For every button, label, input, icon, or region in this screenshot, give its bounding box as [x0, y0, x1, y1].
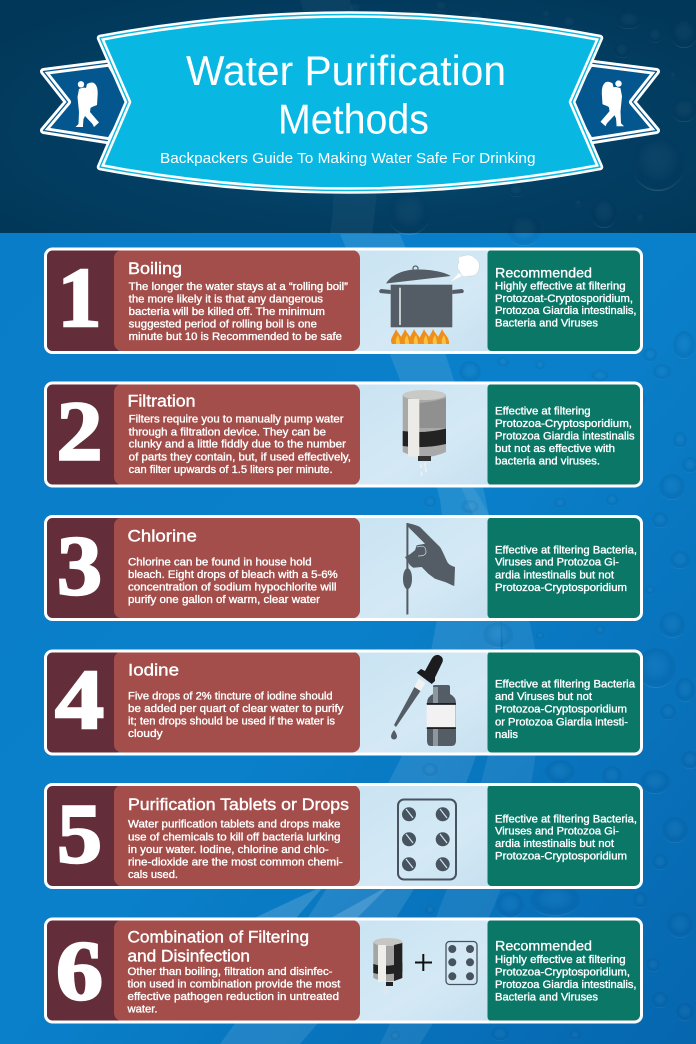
effectiveness text: Effective at filtering	[495, 405, 591, 417]
effectiveness text: ardia intestinalis but not	[495, 838, 614, 850]
icon: small tablets	[446, 942, 477, 984]
text block: purify one gallon of warm, clear water	[128, 594, 320, 606]
number: 5	[57, 787, 102, 881]
number: 6	[56, 924, 103, 1018]
effectiveness text: Protozoa-Cryptosporidium	[495, 851, 627, 863]
text block: can filter upwards of 1.5 liters per minute.	[129, 464, 333, 476]
effectiveness text: Bacteria and Viruses	[495, 318, 599, 330]
text block	[128, 690, 344, 740]
text block: cals used.	[128, 869, 178, 881]
image panel	[340, 518, 500, 618]
title: Methods	[278, 96, 429, 142]
title	[186, 47, 506, 142]
heading: Iodine	[128, 662, 179, 680]
panel: 4 iodine	[46, 651, 642, 754]
icon: hand with pipette	[403, 523, 455, 614]
text block: bacteria will be killed off. The minimum	[129, 306, 325, 318]
teal panel	[488, 518, 641, 618]
image panel	[340, 785, 500, 886]
text block: through a filtration device. They can be	[129, 426, 326, 438]
effectiveness text: Viruses and Protozoa Gi-	[495, 557, 619, 569]
effectiveness text	[495, 954, 636, 1004]
effectiveness text: Viruses and Protozoa Gi-	[495, 826, 619, 838]
text block: bleach. Eight drops of bleach with a 5-6%	[128, 569, 338, 581]
description panel	[114, 920, 360, 1021]
text block	[129, 414, 351, 476]
teal panel	[488, 384, 641, 485]
description panel	[114, 384, 360, 485]
number panel	[46, 652, 122, 752]
teal panel	[488, 920, 641, 1021]
frame	[46, 651, 642, 754]
number panel	[46, 518, 122, 618]
teal panel	[488, 652, 641, 752]
frame	[46, 383, 642, 486]
icon: hiker left	[76, 81, 99, 127]
image panel	[340, 652, 500, 752]
heading	[128, 929, 309, 966]
text block	[129, 281, 348, 343]
effectiveness text: or Protozoa Giardia intesti-	[495, 716, 628, 728]
icon: filter plus tablets	[373, 938, 477, 994]
image panel	[340, 384, 500, 485]
effectiveness text: Protozoa Giardia intestinalis,	[495, 305, 636, 317]
text block: effective pathogen reduction in untreated	[128, 991, 339, 1003]
ribbon: right with hiker	[568, 63, 656, 141]
icon: small filter	[373, 938, 402, 994]
teal panel	[488, 250, 641, 351]
number panel	[46, 384, 122, 485]
text block: Water purification tablets and drops make	[128, 819, 340, 831]
text block: Filters require you to manually pump water	[129, 414, 344, 426]
image panel	[340, 250, 500, 351]
heading: Purification Tablets or Drops	[128, 796, 349, 814]
effectiveness text	[495, 813, 637, 863]
subtitle: Backpackers Guide To Making Water Safe For Drinking	[160, 150, 536, 167]
description panel	[114, 652, 360, 752]
panel: 1 boiling	[46, 249, 642, 352]
effectiveness text	[495, 679, 635, 741]
text block: the more likely it is that any dangerous	[129, 294, 324, 306]
effectiveness text: Effective at filtering Bacteria,	[495, 544, 637, 556]
effectiveness text: Protozoa-Cryptosporidium	[495, 582, 627, 594]
text block: Other than boiling, filtration and disinfec-	[128, 966, 333, 978]
number: 3	[57, 519, 102, 613]
effectiveness text: Highly effective at filtering	[495, 954, 626, 966]
effectiveness text: ardia intestinalis but not	[495, 569, 614, 581]
text block: minute but 10 is Recommended to be safe	[129, 331, 342, 343]
frame	[46, 919, 642, 1022]
panel: 5 tablets	[46, 784, 642, 888]
effectiveness text	[495, 405, 635, 467]
heading: Chlorine	[128, 528, 197, 546]
text block: rine-dioxide are the most common chemi-	[128, 857, 343, 869]
effectiveness text: Highly effective at filtering	[495, 280, 626, 292]
ribbon: left with hiker	[44, 63, 132, 141]
effectiveness text: Protozoa-Cryptosporidium,	[495, 967, 630, 979]
text block	[128, 556, 338, 606]
text block: it; ten drops should be used if the water is	[128, 715, 336, 727]
icon: plus	[415, 954, 432, 971]
icon: water filter	[403, 390, 446, 476]
frame	[46, 249, 642, 352]
recommendation heading: Recommended	[495, 939, 592, 954]
title: Water Purification	[186, 47, 506, 94]
effectiveness text: Protozoa Giardia intestinalis,	[495, 979, 636, 991]
number panel	[46, 785, 122, 886]
effectiveness text	[495, 280, 636, 330]
text block: tion used in combination provide the most	[128, 979, 340, 991]
teal panel	[488, 785, 641, 886]
description panel	[114, 250, 360, 351]
icon: iodine dropper bottle	[391, 655, 456, 746]
effectiveness text: Protozoa Giardia intestinalis	[495, 430, 635, 442]
description panel	[114, 785, 360, 886]
text block: be added per quart of clear water to purify	[128, 703, 344, 715]
number: 2	[56, 384, 102, 478]
icon: hiker right	[600, 80, 624, 126]
effectiveness text: Effective at filtering Bacteria,	[495, 813, 637, 825]
heading: and Disinfection	[128, 948, 250, 966]
number panel	[46, 250, 122, 351]
effectiveness text: Protozoa-Cryptosporidium,	[495, 418, 632, 430]
text block: in your water. Iodine, chlorine and chlo-	[128, 844, 329, 856]
frame	[46, 516, 642, 620]
text block: Chlorine can be found in house hold	[128, 556, 312, 568]
text block: Five drops of 2% tincture of iodine should	[128, 690, 333, 702]
effectiveness text: nalis	[495, 729, 519, 741]
panel: 2 filtration	[46, 383, 642, 486]
heading: Combination of Filtering	[128, 929, 309, 947]
text block: cloudy	[128, 728, 163, 740]
number: 4	[55, 653, 104, 747]
effectiveness text: Bacteria and Viruses	[495, 992, 599, 1004]
panel: 3 chlorine	[46, 516, 642, 620]
image panel	[340, 920, 500, 1021]
description panel	[114, 518, 360, 618]
effectiveness text: bacteria and viruses.	[495, 455, 600, 467]
icon: tablet blister pack	[398, 800, 456, 880]
number: 1	[58, 251, 102, 345]
effectiveness text: and Viruses but not	[495, 691, 592, 703]
text block: concentration of sodium hypochlorite will	[128, 581, 336, 593]
text block: use of chemicals to kill off bacteria lurking	[128, 832, 340, 844]
text block: of parts they contain, but, if used effectively,	[129, 451, 351, 463]
heading: Boiling	[128, 260, 182, 278]
effectiveness text	[495, 544, 637, 594]
text block	[126, 966, 340, 1016]
frame	[46, 784, 642, 888]
text block: suggested period of rolling boil is one	[129, 318, 317, 330]
text block	[128, 819, 343, 881]
text block: water.	[126, 1004, 158, 1016]
effectiveness text: Protozoa-Cryptosporidium	[495, 704, 627, 716]
text block: clunky and a little fiddly due to the number	[129, 439, 346, 451]
heading: Filtration	[128, 393, 196, 411]
number panel	[46, 920, 122, 1021]
icon: boiling pot	[379, 255, 480, 344]
effectiveness text: Effective at filtering Bacteria	[495, 679, 635, 691]
recommendation heading: Recommended	[495, 265, 592, 280]
effectiveness text: Protozoat-Cryptosporidium,	[495, 293, 633, 305]
banner	[100, 14, 600, 190]
panel: 6 combination	[46, 919, 642, 1022]
effectiveness text: but not as effective with	[495, 443, 615, 455]
text block: The longer the water stays at a “rolling boil”	[129, 281, 348, 293]
